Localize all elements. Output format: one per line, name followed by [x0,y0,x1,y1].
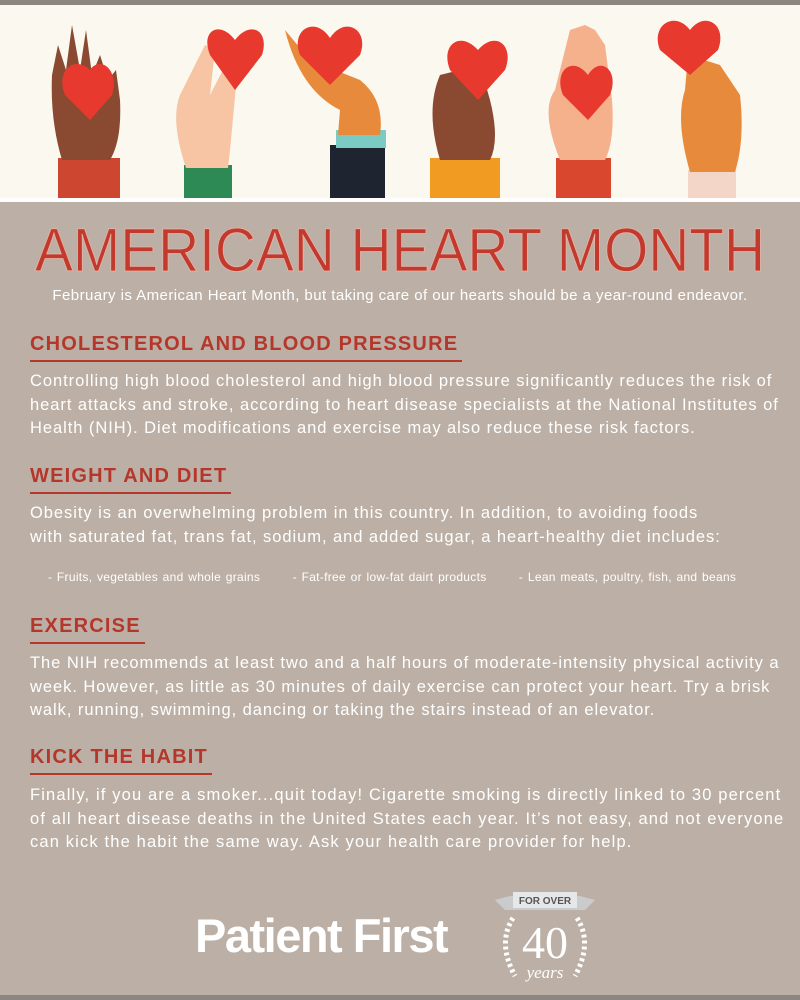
badge: 40 years: years [525,963,564,982]
text: cholesterol: heart attacks and stroke, according to heart disease specialists at the National Institutes of [30,396,779,414]
text: exercise: walk, running, swimming, dancing or taking the stairs instead of an elevator. [30,701,655,719]
text: kick: of all heart disease deaths in the United States each year. It’s not easy, and not everyone [30,810,784,828]
text: kick: can kick the habit the same way. Ask your health care provider for help. [30,833,633,851]
hand 4 [430,41,508,198]
text: cholesterol [30,372,779,437]
heading: exercise: EXERCISE [30,615,141,637]
heading: cholesterol: CHOLESTEROL AND BLOOD PRESSURE [30,333,458,355]
subtitle: February is American Heart Month, but taking care of our hearts should be a year-round endeavor. [52,287,748,304]
heading: kick: KICK THE HABIT [30,746,208,768]
hand 3 [285,27,386,198]
badge: 40 years [495,892,595,982]
text: exercise: The NIH recommends at least two and a half hours of moderate-intensity physical activity a [30,654,779,672]
logo [195,892,595,982]
hand 1 [52,25,120,198]
text: weight [30,504,721,546]
text: exercise [30,654,779,719]
text: weight: with saturated fat, trans fat, sodium, and added sugar, a heart-healthy diet includes: [30,528,721,546]
hand 5 [549,25,613,198]
hand 2 [176,29,264,198]
text: kick [30,786,784,851]
logo: Patient First [195,909,447,962]
text: weight: Obesity is an overwhelming problem in this country. In addition, to avoiding foods [30,504,698,522]
heading: weight: WEIGHT AND DIET [30,465,227,487]
divider [0,198,800,202]
text: cholesterol: Health (NIH). Diet modifications and exercise may also reduce these risk factors. [30,419,696,437]
badge: 40 years: FOR OVER [519,896,572,907]
text: exercise: week. However, as little as 30 minutes of daily exercise can protect your heart. Try a brisk [30,678,770,696]
badge: 40 years: 40 [522,917,568,968]
banner: hands with hearts [0,5,800,198]
top frame [0,0,800,5]
bullets: - Fruits, vegetables and whole grains - Fat-free or low-fat dairt products - Lean meats, poultry, fish, and beans [48,570,736,584]
bottom strip [0,995,800,1000]
text: kick: Finally, if you are a smoker...quit today! Cigarette smoking is directly linked to 30 percent [30,786,781,804]
hand 6 [658,21,742,198]
text: cholesterol: Controlling high blood cholesterol and high blood pressure significantly reduces the risk of [30,372,772,390]
